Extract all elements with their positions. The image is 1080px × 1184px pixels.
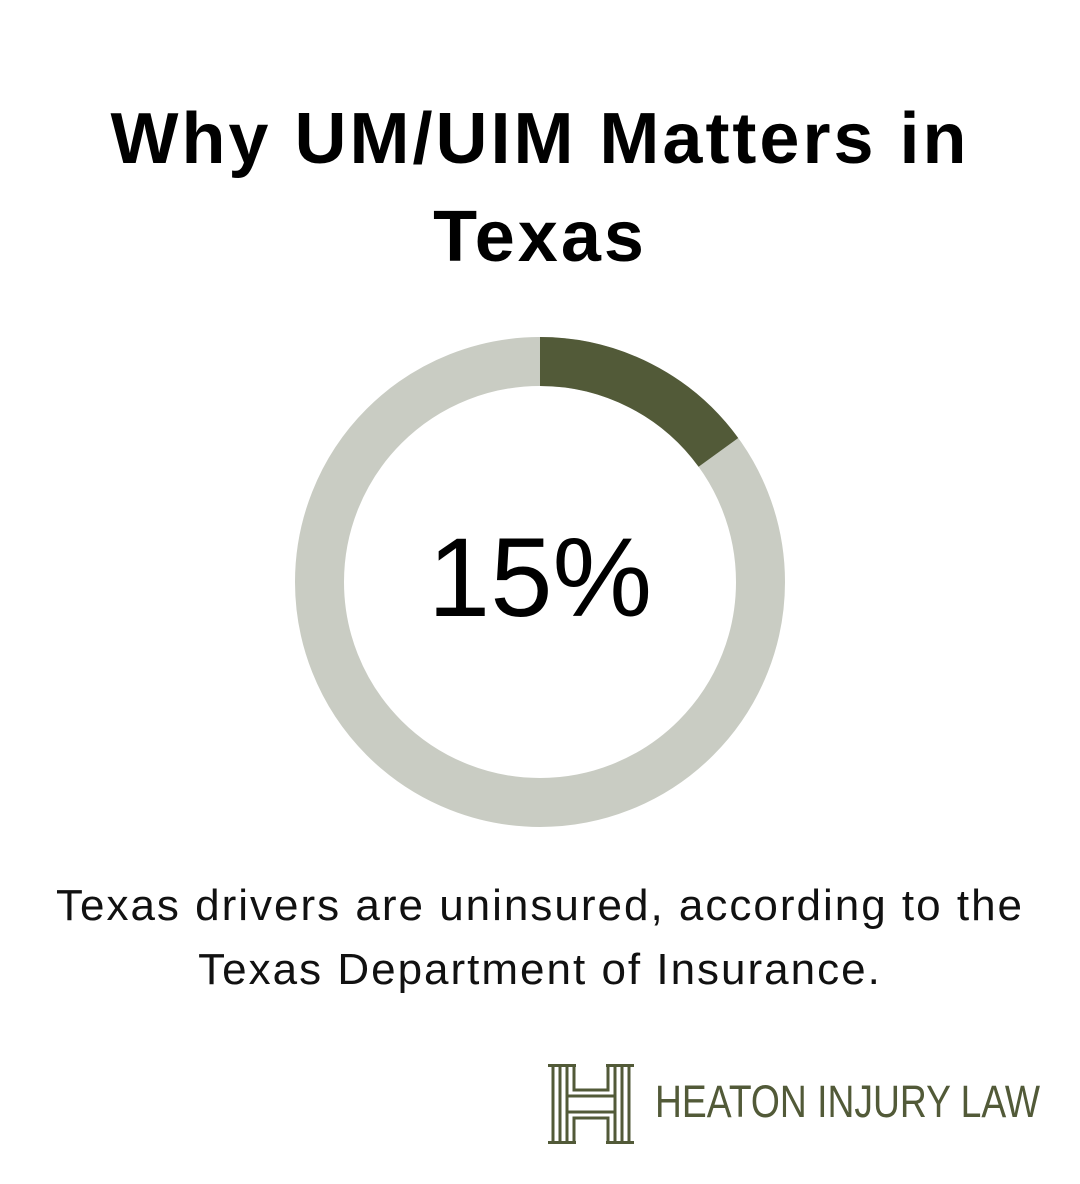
description text <box>56 881 1024 994</box>
logo <box>548 1064 1040 1144</box>
icon: H monogram <box>548 1064 634 1144</box>
title: Why UM/UIM Matters in <box>110 99 970 179</box>
percentage: 15% <box>428 515 652 640</box>
description text: Texas Department of Insurance. <box>198 945 882 994</box>
title: Texas <box>433 197 647 277</box>
description text: Texas drivers are uninsured, according to the <box>56 881 1024 930</box>
title <box>110 99 970 277</box>
